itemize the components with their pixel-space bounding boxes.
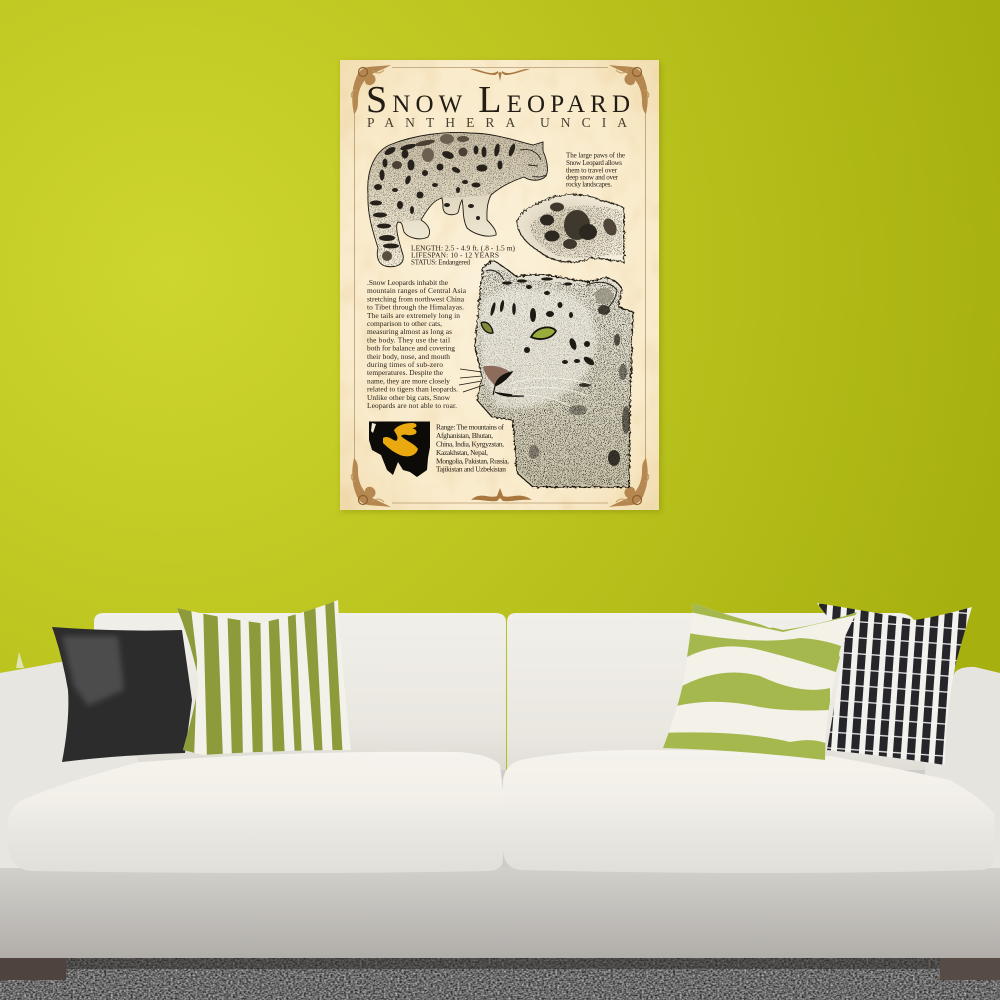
right seat cushion (503, 750, 995, 873)
text: main description: their body, nose, and mouth (367, 352, 450, 361)
subtitle: Latin name: PANTHERA UNCIA (367, 115, 627, 130)
text: key facts (411, 244, 516, 266)
illustration: paw (517, 194, 624, 262)
text: range list: Range: The mountains of (436, 423, 505, 432)
text: main description: stretching from northwest China (367, 294, 465, 303)
range map (369, 422, 430, 477)
illustration: standing snow leopard (368, 132, 547, 267)
left seat cushion (7, 752, 503, 873)
vase on left (16, 652, 24, 668)
portrait: light face fur (480, 287, 596, 409)
text: paws note: rocky landscapes. (566, 180, 612, 188)
text: main description: measuring almost as long as (367, 327, 452, 336)
sofa base (0, 868, 1000, 958)
carpet (0, 955, 1000, 1000)
text: key facts: LIFESPAN: 10 - 12 YEARS (411, 251, 499, 260)
text: main description: temperatures. Despite the (367, 368, 444, 377)
text: main description: Leopards are not able to roar. (367, 401, 457, 410)
frame lines and ornaments (351, 65, 649, 507)
paw pads (540, 202, 619, 249)
sofa left leg (0, 955, 66, 980)
text: paws note: The large paws of the (566, 152, 625, 160)
text: main description: both for balance and covering (367, 344, 455, 353)
leopard spots (370, 134, 517, 261)
text: paws note: them to travel over (566, 166, 618, 174)
pillow: green horizontal stripes (663, 603, 857, 760)
text: main description: during times of sub-zero (367, 360, 443, 369)
portrait: whiskers (459, 369, 590, 406)
sofa right arm (925, 667, 1000, 872)
portrait: eyes (481, 322, 556, 339)
text: paws note (566, 152, 625, 188)
sofa left arm (0, 662, 150, 872)
range map: habitat in yellow (383, 423, 418, 456)
text: main description: Unlike other big cats, Snow (367, 393, 451, 402)
damask background pattern (340, 60, 659, 510)
text: key facts: STATUS: Endangered (411, 258, 470, 266)
text: main description: to Tibet through the Himalayas. (367, 303, 464, 312)
text: key facts: LENGTH: 2.5 - 4.9 ft. (.8 - 1.5 m) (411, 244, 516, 253)
text: main description (367, 278, 467, 410)
sofa back cushion left (94, 613, 506, 775)
text: main description: related to tigers than leopards. (367, 385, 458, 394)
text: paws note: deep snow and over (566, 174, 619, 182)
text: main description: comparison to other cats, (367, 319, 442, 328)
portrait: nose and mouth (483, 366, 510, 386)
green wall (0, 0, 1000, 700)
text: main description: .Snow Leopards inhabit the (367, 278, 449, 287)
portrait: ears (486, 270, 617, 308)
portrait: forehead and cheek markings (489, 277, 630, 466)
text: main description: the body. They use the tail (367, 335, 450, 344)
sofa (0, 613, 1000, 980)
text: main description: The tails are extremely long in (367, 311, 460, 320)
pillow: green vertical stripes (177, 600, 351, 755)
illustration: snow leopard portrait (459, 260, 633, 487)
poster (340, 60, 661, 512)
text: range list (436, 423, 509, 474)
text: paws note: Snow Leopard allows (566, 159, 622, 167)
text: range list: China, India, Kyrgyzstan, (436, 440, 504, 449)
sofa right leg (940, 955, 1000, 980)
poster shadow (341, 62, 661, 512)
sofa inner frame behind seats (60, 770, 960, 872)
text: main description: mountain ranges of Central Asia (367, 286, 467, 295)
pillow: dark grey (52, 627, 192, 762)
sofa back cushion right (507, 613, 965, 790)
title: SNOW LEOPARD (366, 79, 630, 121)
text: range list: Afghanistan, Bhutan, (436, 431, 493, 440)
text: main description: name, they are more closely (367, 376, 450, 385)
text: range list: Mongolia, Pakistan, Russia, (436, 456, 509, 465)
text: range list: Tajikistan and Uzbekistan (436, 465, 506, 474)
poster paper (340, 60, 659, 510)
pillow: black and white grid (817, 603, 972, 765)
leopard face (520, 149, 546, 177)
text: range list: Kazakhstan, Nepal, (436, 448, 488, 457)
